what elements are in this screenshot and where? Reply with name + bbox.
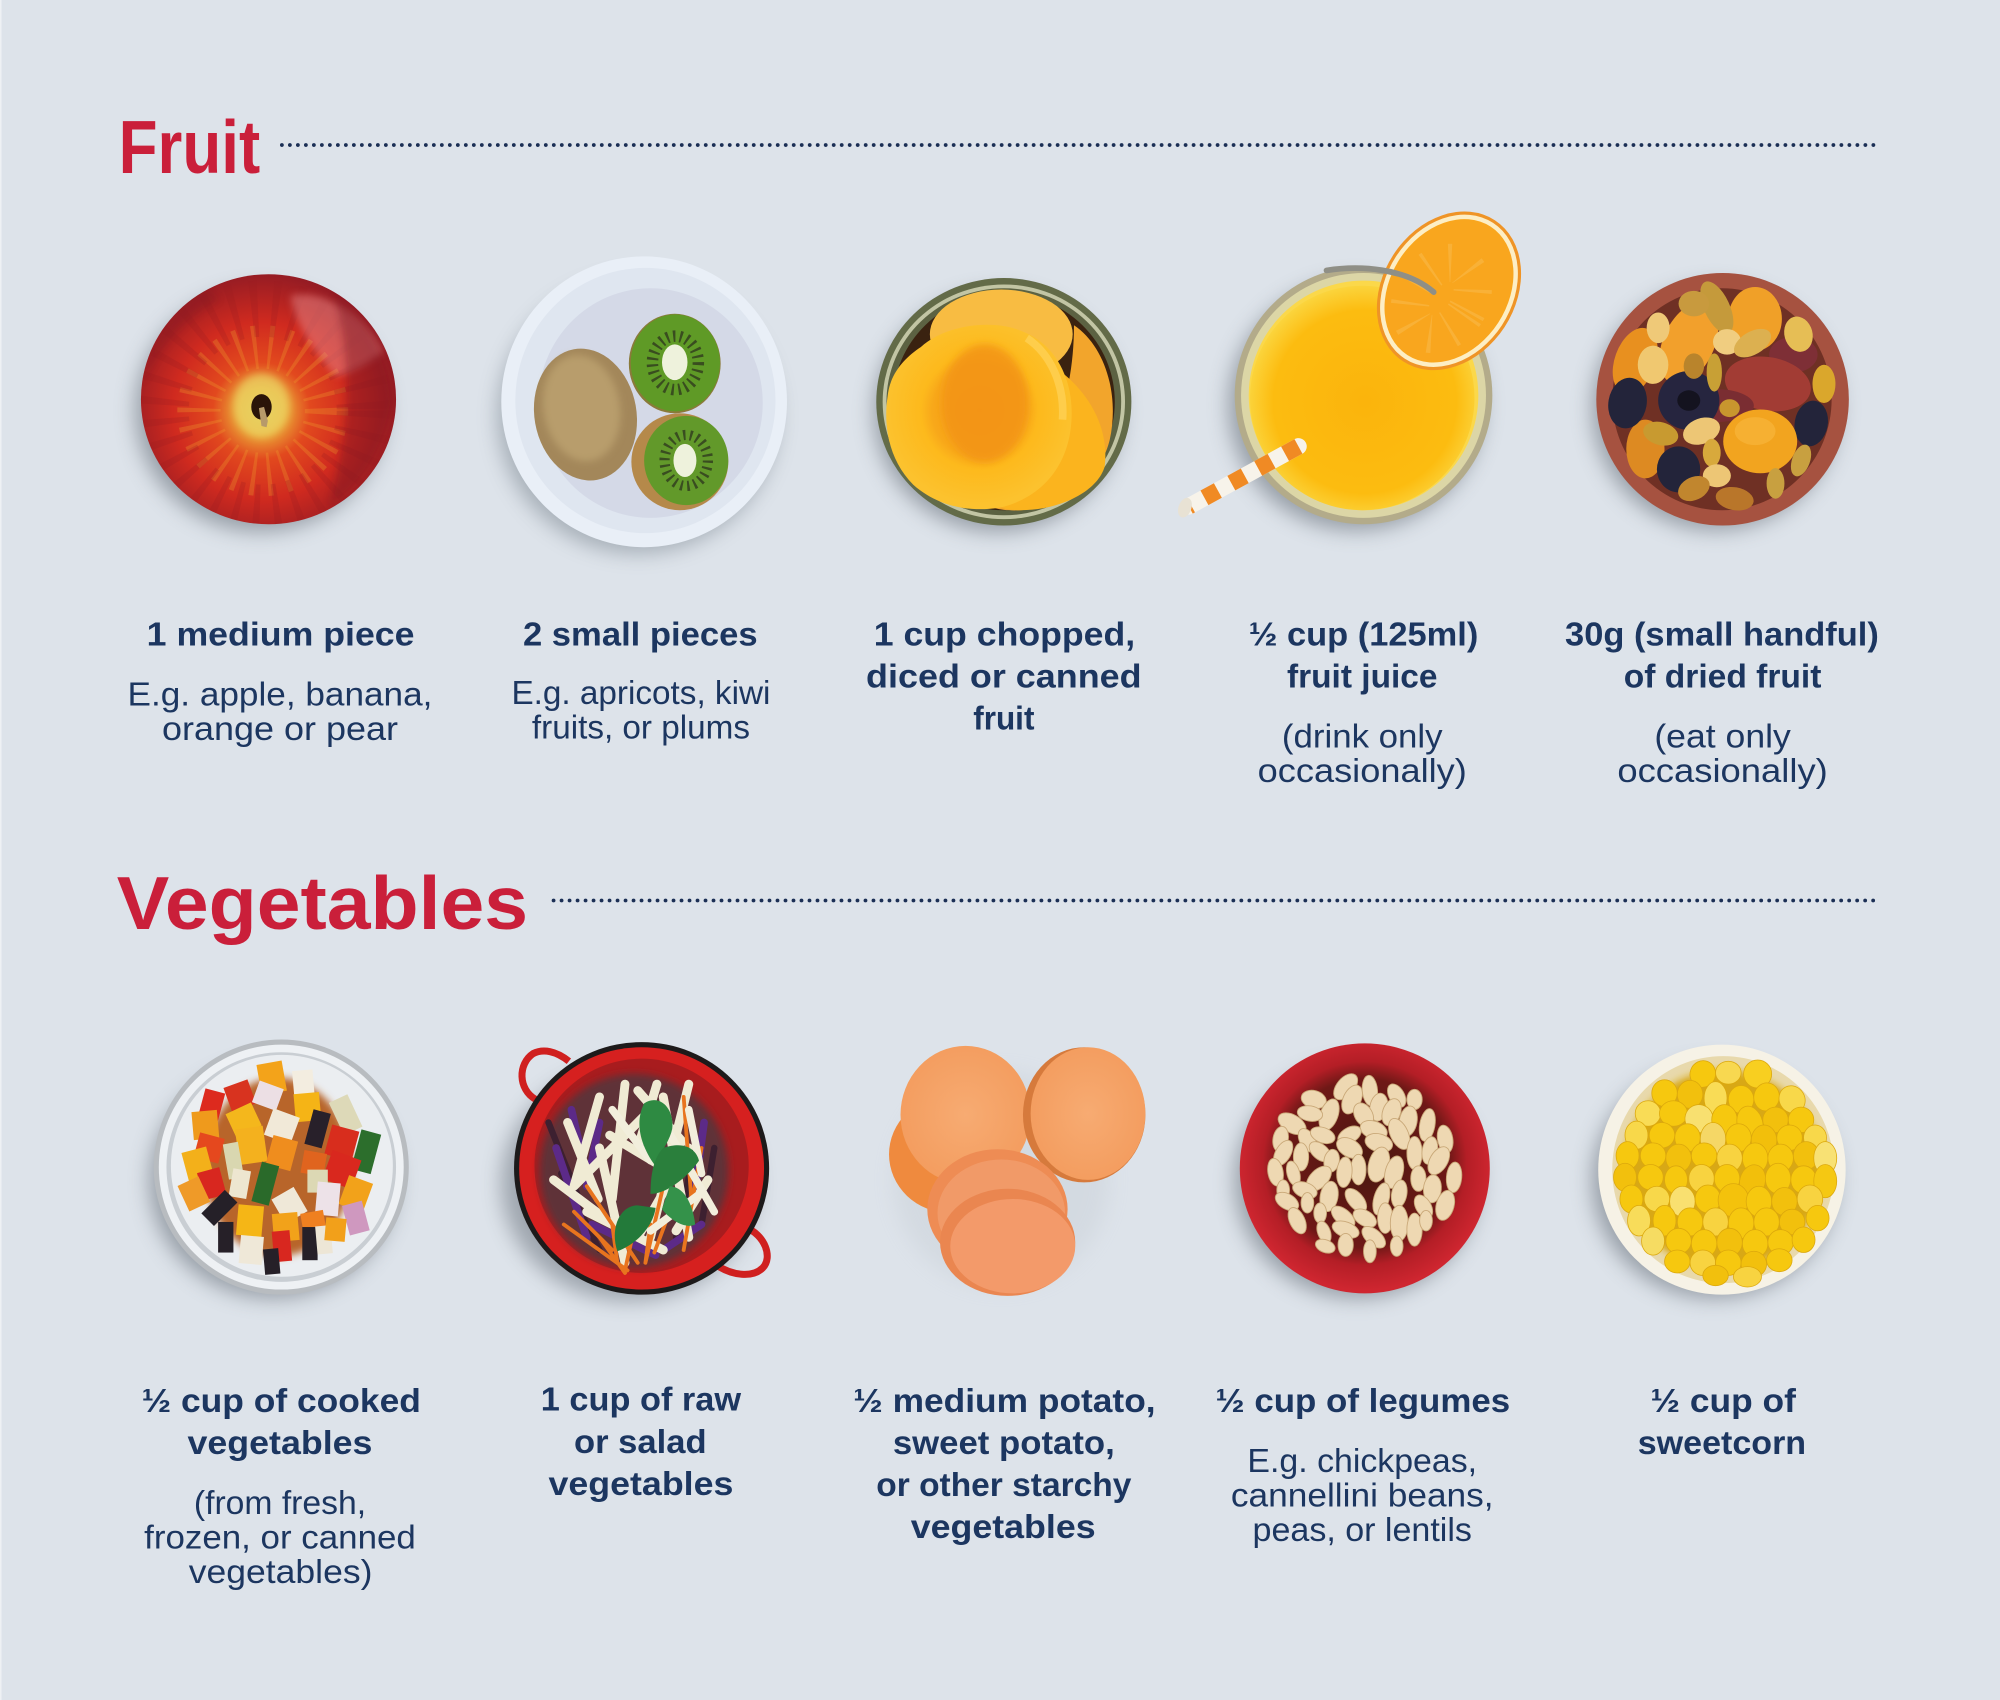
label: 2 small pieces bbox=[511, 616, 770, 747]
label: 1 cup of raw or salad vegetables: or salad bbox=[574, 1424, 707, 1461]
label: half cup of cooked vegetables: ½ cup of cooked bbox=[142, 1383, 421, 1420]
whole kiwi bbox=[524, 340, 647, 489]
item: two small pieces bbox=[497, 256, 787, 747]
label: half cup fruit juice bbox=[1249, 616, 1478, 790]
label: half medium potato: or other starchy bbox=[876, 1467, 1132, 1504]
label: half cup fruit juice: ½ cup (125ml) bbox=[1249, 616, 1478, 653]
label: half cup of cooked vegetables: (from fresh, bbox=[194, 1485, 366, 1522]
icon: can of peaches bbox=[874, 278, 1131, 532]
icon: white bowl of sweetcorn bbox=[1592, 1045, 1846, 1298]
kiwi half upper bbox=[629, 314, 721, 413]
label: half medium potato: vegetables bbox=[911, 1509, 1096, 1546]
label: half medium potato bbox=[853, 1383, 1156, 1546]
label: half cup of sweetcorn: ½ cup of bbox=[1651, 1383, 1797, 1420]
kiwi half lower bbox=[631, 413, 728, 510]
label: 1 cup chopped: fruit bbox=[973, 701, 1034, 738]
icon: glass bowl of vegetables bbox=[149, 1040, 409, 1298]
heading: Fruit: Fruit bbox=[119, 105, 260, 189]
peach halve bbox=[886, 325, 1072, 509]
icon: glass of orange juice bbox=[1175, 184, 1550, 531]
metal straw bbox=[1327, 268, 1434, 292]
item: raw or salad vegetables bbox=[501, 1042, 769, 1503]
heading: Vegetables: Vegetables bbox=[117, 861, 528, 945]
label: 1 medium piece bbox=[128, 616, 432, 748]
orange slice bbox=[1348, 184, 1550, 398]
item: legumes bbox=[1216, 1043, 1510, 1549]
icon: sweet potato slices bbox=[889, 1046, 1145, 1296]
label: half cup of cooked vegetables: vegetables) bbox=[189, 1554, 372, 1591]
label: half cup of cooked vegetables bbox=[142, 1383, 421, 1591]
label: half cup of sweetcorn bbox=[1638, 1383, 1806, 1462]
icon: apple bbox=[135, 274, 396, 532]
item: starchy vegetables bbox=[853, 1046, 1156, 1546]
label: 30g dried fruit: 30g (small handful) bbox=[1565, 616, 1879, 653]
icon: bowl of dried fruit bbox=[1592, 273, 1849, 531]
label: half cup of cooked vegetables: frozen, or canned bbox=[144, 1519, 416, 1556]
sweetcorn kernels bbox=[1614, 1057, 1837, 1287]
label: 2 small pieces: fruits, or plums bbox=[532, 710, 750, 747]
label: half cup of legumes: cannellini beans, bbox=[1231, 1477, 1494, 1514]
striped straw bbox=[1175, 446, 1298, 519]
label: 2 small pieces: 2 small pieces bbox=[523, 616, 758, 653]
icon: plate of kiwi fruit bbox=[497, 256, 787, 554]
label: 30g dried fruit: of dried fruit bbox=[1624, 658, 1821, 695]
item: one medium piece bbox=[128, 274, 432, 748]
label: half cup of legumes: ½ cup of legumes bbox=[1216, 1383, 1510, 1420]
label: half cup of legumes: peas, or lentils bbox=[1253, 1512, 1472, 1549]
item: 30g dried fruit bbox=[1565, 273, 1879, 790]
label: 1 medium piece: 1 medium piece bbox=[147, 616, 415, 653]
label: half cup of legumes bbox=[1216, 1383, 1510, 1549]
item: one cup chopped bbox=[866, 278, 1142, 738]
label: half cup fruit juice: occasionally) bbox=[1258, 753, 1467, 790]
label: 30g dried fruit bbox=[1565, 616, 1879, 790]
label: 1 cup chopped: 1 cup chopped, bbox=[874, 616, 1135, 653]
label: half cup of legumes: E.g. chickpeas, bbox=[1247, 1443, 1477, 1480]
label: 2 small pieces: E.g. apricots, kiwi bbox=[511, 675, 770, 712]
salad leaves bbox=[615, 1100, 699, 1251]
label: 1 cup of raw or salad vegetables: vegetables bbox=[548, 1466, 733, 1503]
item: cooked vegetables bbox=[142, 1040, 421, 1591]
salad bbox=[548, 1084, 714, 1273]
label: 1 cup of raw or salad vegetables bbox=[541, 1382, 741, 1503]
label: 30g dried fruit: (eat only bbox=[1654, 718, 1791, 755]
label: 30g dried fruit: occasionally) bbox=[1617, 753, 1828, 790]
label: 1 medium piece: orange or pear bbox=[162, 711, 398, 748]
colander handles bbox=[522, 1051, 767, 1274]
label: 1 cup of raw or salad vegetables: 1 cup of raw bbox=[541, 1382, 741, 1419]
panel: vegetables section bbox=[117, 861, 1874, 1591]
label: 1 cup chopped: diced or canned bbox=[866, 658, 1142, 695]
icon: red colander of salad bbox=[501, 1042, 769, 1301]
item: half cup fruit juice bbox=[1175, 184, 1550, 790]
label: half cup fruit juice: fruit juice bbox=[1287, 658, 1437, 695]
label: half cup of cooked vegetables: vegetables bbox=[188, 1425, 372, 1462]
item: sweetcorn bbox=[1592, 1045, 1846, 1462]
icon: red bowl of cannellini beans bbox=[1235, 1043, 1490, 1298]
label: half cup of sweetcorn: sweetcorn bbox=[1638, 1425, 1806, 1462]
label: half medium potato: ½ medium potato, bbox=[853, 1383, 1156, 1420]
label: half cup fruit juice: (drink only bbox=[1282, 718, 1443, 755]
panel: fruit section bbox=[119, 105, 1879, 790]
label: 1 cup chopped bbox=[866, 616, 1142, 738]
label: 1 medium piece: E.g. apple, banana, bbox=[128, 676, 432, 713]
label: half medium potato: sweet potato, bbox=[893, 1425, 1115, 1462]
